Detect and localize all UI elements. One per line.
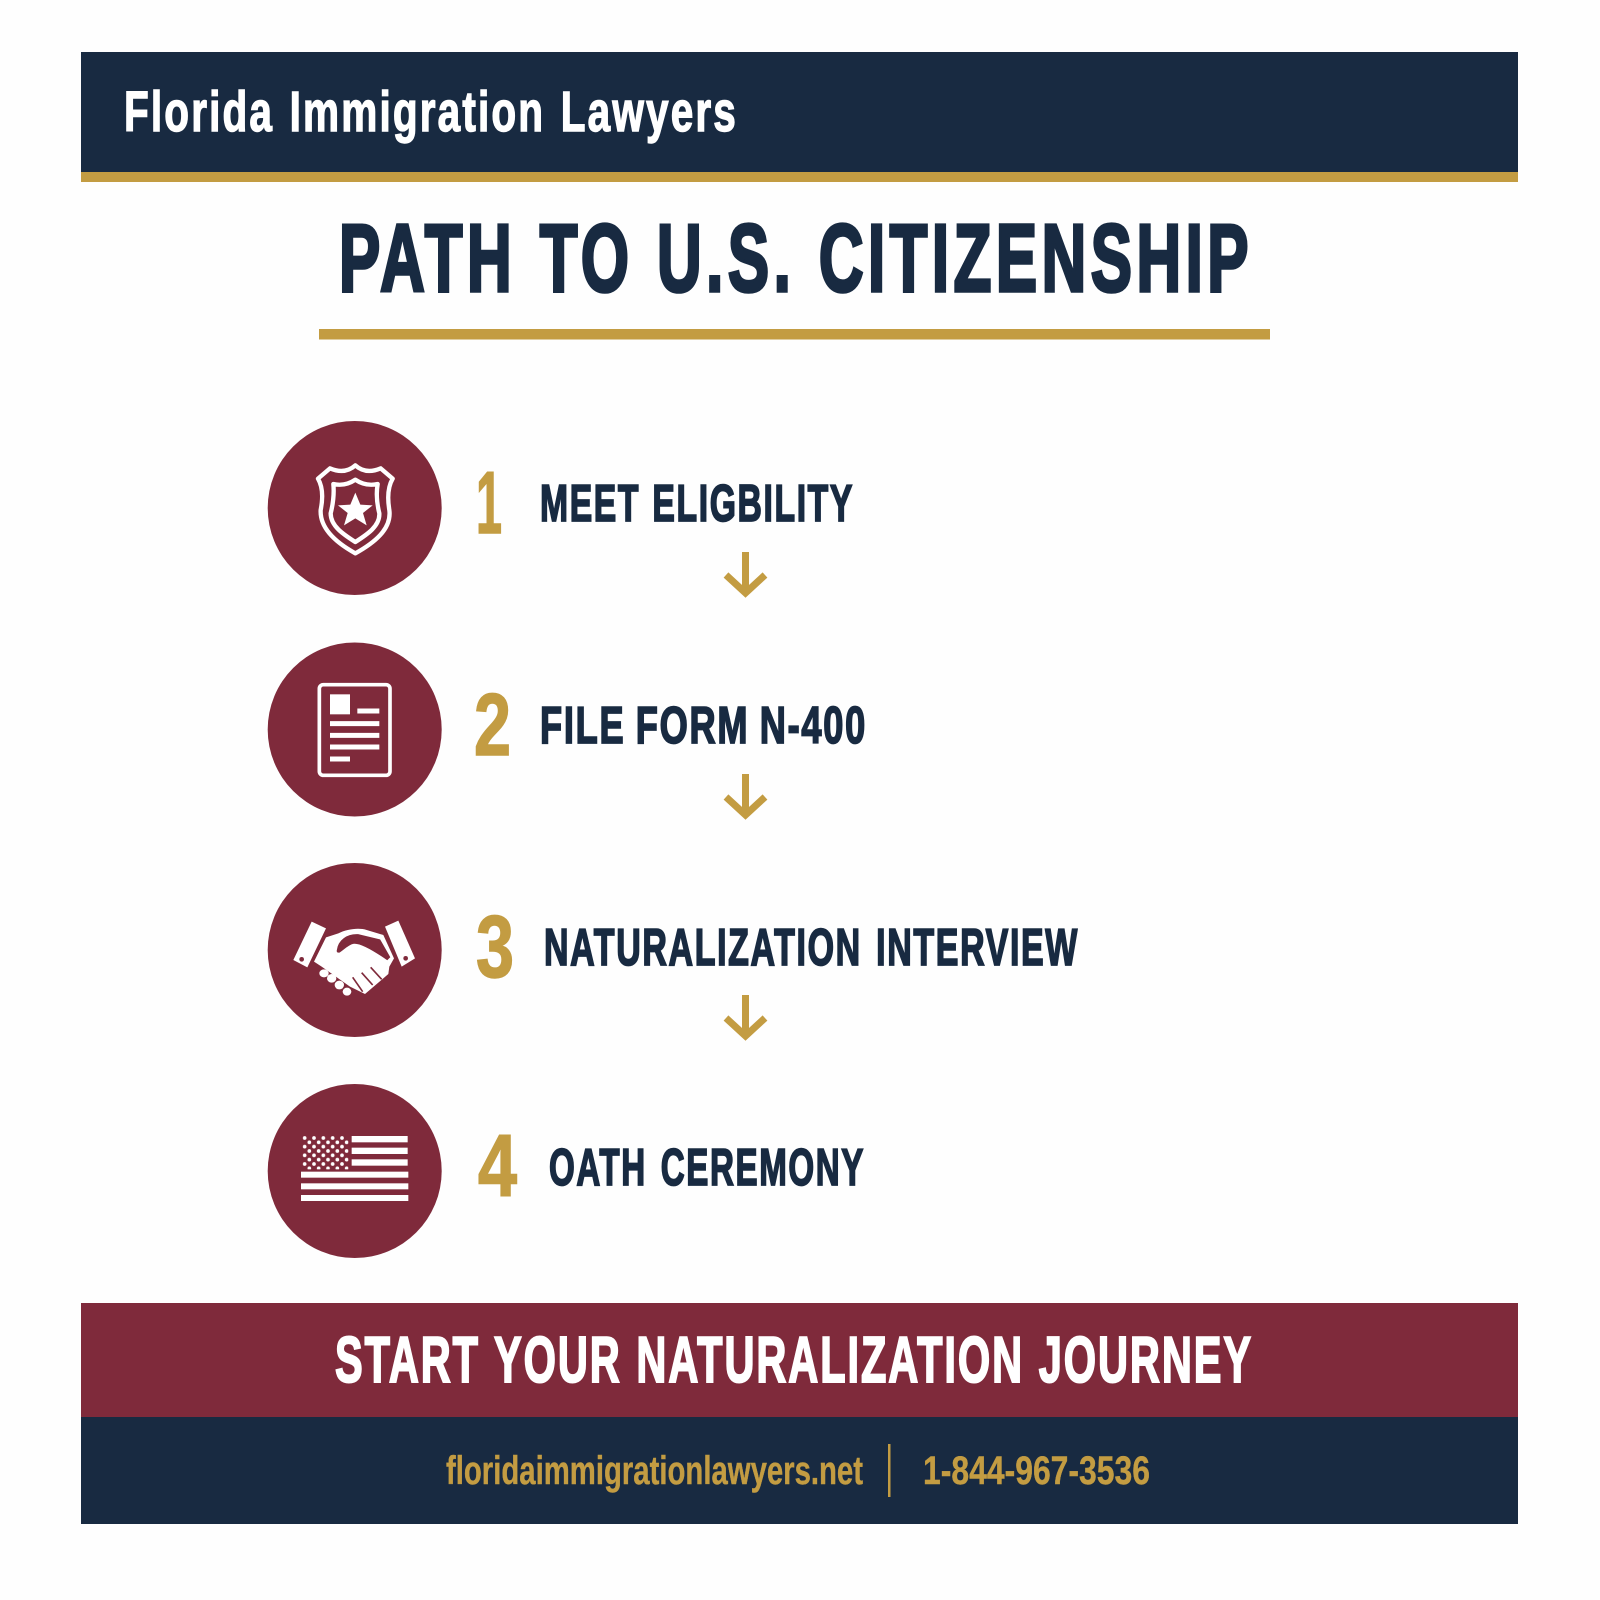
step 1: meet eligibility xyxy=(268,421,854,595)
call-to-action banner xyxy=(81,1303,1518,1417)
icon: form document xyxy=(268,642,442,816)
website: floridaimmigrationlawyers.net xyxy=(446,1449,863,1493)
main title xyxy=(319,205,1270,340)
icon: police-style shield with star xyxy=(268,421,442,595)
number 4: 4 xyxy=(478,1116,517,1215)
arrow 2 to 3 xyxy=(726,774,765,815)
firm name: Florida Immigration Lawyers xyxy=(124,80,738,144)
label: MEET ELIGBILITY xyxy=(540,475,854,533)
arrow 1 to 2 xyxy=(726,552,765,594)
arrow 3 to 4 xyxy=(726,995,765,1036)
step 2: file form n-400 xyxy=(268,642,867,816)
phone number: 1-844-967-3536 xyxy=(923,1449,1150,1493)
label: FILE FORM N-400 xyxy=(540,697,867,755)
label: OATH CEREMONY xyxy=(549,1139,865,1197)
icon: american flag xyxy=(268,1084,442,1258)
step 4: oath ceremony xyxy=(268,1084,865,1258)
number 2: 2 xyxy=(474,675,511,774)
header banner xyxy=(81,52,1518,182)
footer contact bar xyxy=(81,1417,1518,1524)
step 3: naturalization interview xyxy=(268,863,1079,1037)
number 3: 3 xyxy=(476,897,514,996)
number 1: 1 xyxy=(476,453,502,552)
label: NATURALIZATION INTERVIEW xyxy=(544,919,1079,977)
icon: handshake xyxy=(268,863,442,1037)
